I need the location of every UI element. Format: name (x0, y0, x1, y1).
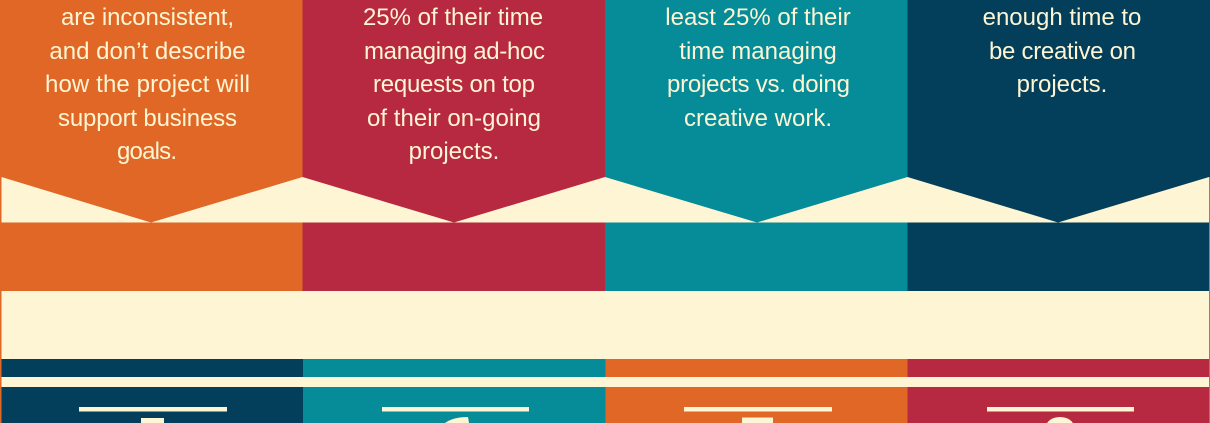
text: crimson column: managing ad-hoc (364, 38, 545, 65)
text: navy column (983, 4, 1141, 98)
text: crimson column: 25% of their time (363, 4, 543, 31)
number fragment: navy (141, 418, 164, 423)
panel: teal column (454, 0, 908, 291)
cream band (2, 291, 1209, 359)
panel: lower navy block (2, 387, 303, 423)
text: navy column: enough time to (983, 4, 1141, 31)
number fragment: teal (445, 417, 469, 423)
text: orange column (45, 4, 250, 165)
text: teal column: creative work. (684, 105, 832, 132)
text: crimson column (363, 4, 545, 165)
panel: lower teal block (303, 387, 606, 423)
text: orange column: how the project will (45, 71, 250, 98)
number fragment: orange (742, 418, 773, 423)
text: crimson column: requests on top (373, 71, 535, 98)
text: navy column: be creative on (989, 38, 1136, 65)
text: navy column: projects. (1017, 71, 1107, 98)
lower colour strip (2, 359, 1209, 377)
chevron cutout: crimson (151, 177, 454, 222)
text: orange column: and don’t describe (49, 38, 246, 65)
text: orange column: are inconsistent, (61, 4, 234, 31)
panel: lower crimson block (908, 387, 1209, 423)
chevron cutout: navy (757, 177, 1058, 222)
text: crimson column: projects. (409, 138, 499, 165)
text: teal column: projects vs. doing (667, 71, 850, 98)
chevron cutout: orange (2, 177, 151, 222)
edge sliver: right (1209, 177, 1210, 423)
panel: navy column (757, 0, 1210, 291)
number fragment: crimson (1046, 417, 1074, 423)
edge sliver: left (0, 222, 2, 423)
text: teal column: least 25% of their (665, 4, 851, 31)
chevron cutout: teal (454, 177, 757, 222)
text: orange column: support business (58, 105, 237, 132)
panel: crimson column (151, 0, 605, 291)
text: teal column (665, 4, 851, 132)
panel: orange column (0, 0, 302, 291)
panel: lower orange block (606, 387, 908, 423)
chevron cutout: right edge (1058, 177, 1209, 222)
text: crimson column: of their on-going (367, 105, 541, 132)
text: orange column: goals. (117, 138, 177, 165)
text: teal column: time managing (679, 38, 837, 65)
